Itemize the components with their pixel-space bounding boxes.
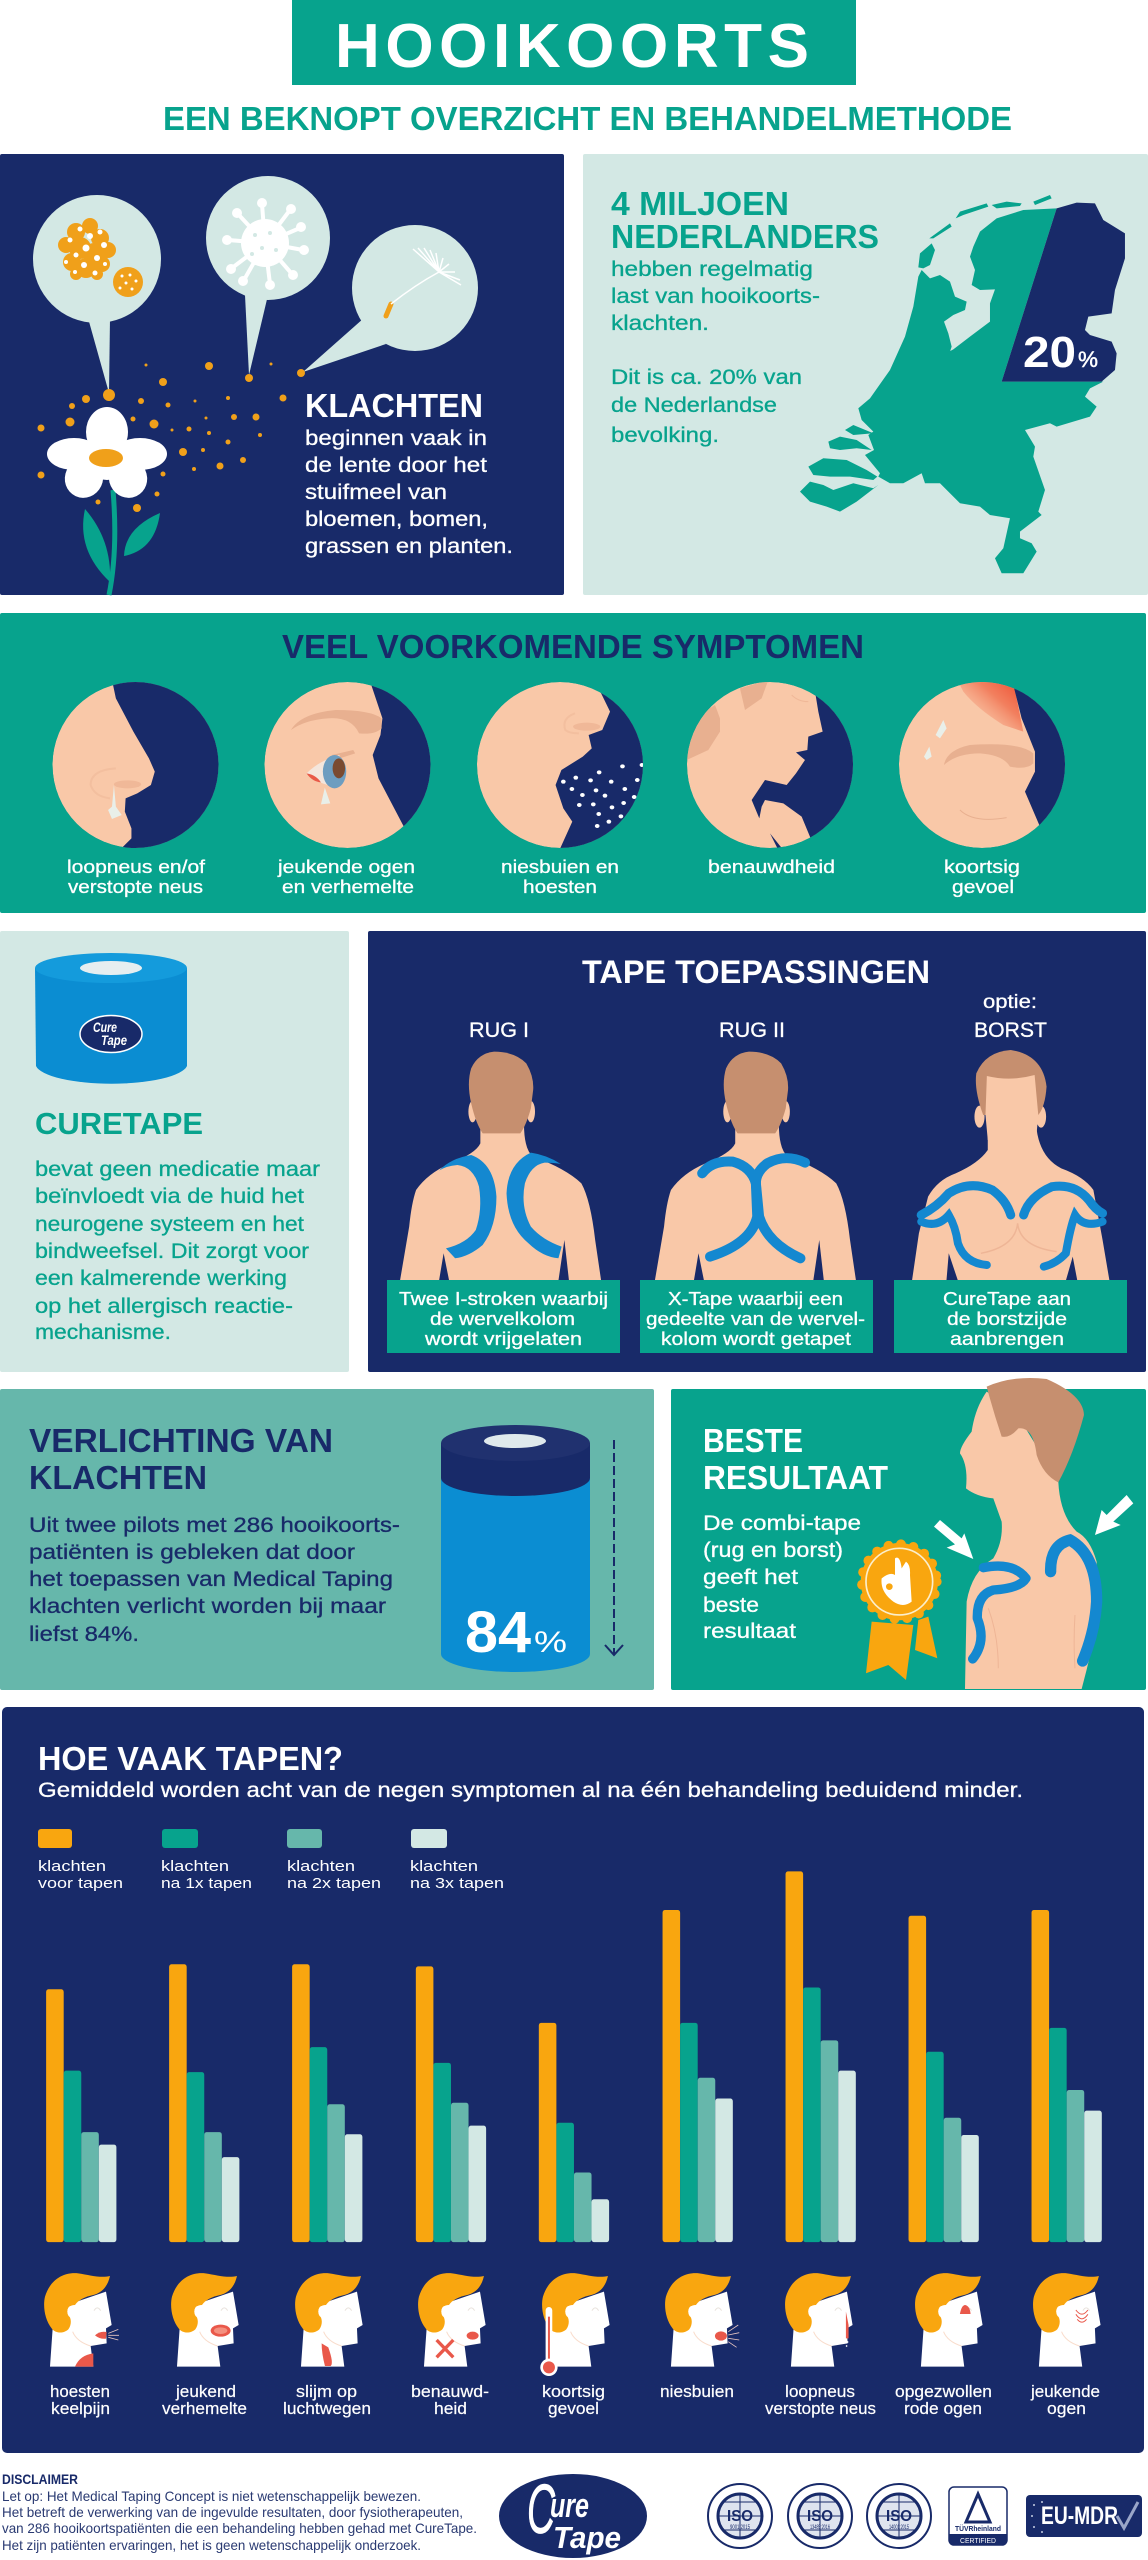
- heading: beste resultaat: BESTE: [703, 1422, 803, 1459]
- label: 20 percent: [1023, 328, 1098, 377]
- symptom names: niesbuien: [660, 2382, 734, 2401]
- badge: ISO 14001: ISO: [886, 2508, 912, 2525]
- heading: klachten: KLACHTEN: [305, 387, 483, 424]
- text: beste resultaat body: geeft het: [703, 1566, 798, 1589]
- symptom names: verstopte neus: [765, 2399, 876, 2418]
- figure: person with combi tape: [934, 1378, 1133, 1689]
- text: klachten body: de lente door het: [305, 454, 487, 477]
- legend: klachten: [161, 1858, 229, 1875]
- symptom names: opgezwollen: [895, 2382, 992, 2401]
- heading: 4 miljoen nederlanders: NEDERLANDERS: [611, 218, 879, 255]
- label: 20 percent: %: [1078, 347, 1098, 372]
- text: nederlanders body: [611, 258, 820, 447]
- logo: curetape: ure: [550, 2487, 589, 2525]
- caption: rug I: Twee I-stroken waarbij: [399, 1289, 608, 1309]
- icon: eye: [264, 682, 433, 850]
- title banner: [292, 0, 856, 85]
- text: beste resultaat body: [703, 1512, 861, 1643]
- subtitle: EEN BEKNOPT OVERZICHT EN BEHANDELMETHODE: [163, 100, 1012, 137]
- heading: beste resultaat: [703, 1422, 888, 1496]
- symptom names: jeukend: [175, 2382, 236, 2401]
- logo: curetape: Tape: [553, 2520, 621, 2555]
- badge: ISO 13485: 13485:2016: [810, 2525, 830, 2531]
- bars: jeukend verhemelte: [169, 1964, 239, 2242]
- icon: virus bubble: [206, 176, 330, 375]
- figure labels: [469, 992, 1047, 1042]
- icon: tape roll: Tape: [101, 1032, 127, 1048]
- bars: loopneus verstopte neus: [786, 1871, 856, 2242]
- badge: ISO 14001: [867, 2484, 931, 2548]
- text: klachten body: grassen en planten.: [305, 535, 513, 558]
- text: nederlanders body: hebben regelmatig: [611, 258, 813, 281]
- symptom names: verhemelte: [162, 2399, 247, 2418]
- figure labels: BORST: [974, 1019, 1047, 1042]
- disclaimer: DISCLAIMER: [2, 2471, 78, 2487]
- caption: borst: de borstzijde: [947, 1309, 1067, 1329]
- panel: klachten: [0, 154, 564, 595]
- figure: rug I: [400, 1052, 601, 1281]
- chart: tape cylinder 84 percent: 84: [465, 1600, 531, 1665]
- symptom names: benauwd-: [411, 2382, 489, 2401]
- badge: EU-MDR: [1026, 2495, 1142, 2537]
- panel: hoe vaak tapen: [2, 1707, 1144, 2453]
- icon: head jeukende ogen: [1033, 2273, 1101, 2367]
- bars: jeukende ogen: [1032, 1910, 1102, 2242]
- symptom labels: [67, 857, 1020, 897]
- icon: flower: [47, 407, 167, 595]
- text: verlichting body: patiënten is gebleken dat door: [29, 1541, 355, 1564]
- symptom names: heid: [434, 2399, 467, 2418]
- legend: na 1x tapen: [161, 1875, 252, 1892]
- map: netherlands: [800, 195, 1125, 573]
- heading: verlichting: KLACHTEN: [29, 1459, 207, 1496]
- title banner: HOOIKOORTS: [335, 12, 809, 81]
- icon: head luchtwegen: [295, 2273, 363, 2367]
- disclaimer: [2, 2471, 477, 2553]
- caption: rug I: wordt vrijgelaten: [424, 1329, 582, 1349]
- legend: na 2x tapen: [287, 1875, 381, 1892]
- icon: head koorts: [540, 2273, 610, 2376]
- text: verlichting body: klachten verlicht worden bij maar: [29, 1595, 386, 1618]
- pollen dots: [38, 362, 305, 512]
- icon: award medal: [861, 1543, 938, 1680]
- panel: verlichting van klachten: [0, 1389, 654, 1690]
- icon: fever: [899, 678, 1073, 848]
- text: curetape body: bevat geen medicatie maar: [35, 1158, 320, 1181]
- caption: rug I: de wervelkolom: [430, 1309, 575, 1329]
- text: nederlanders body: Dit is ca. 20% van: [611, 366, 802, 389]
- badge: ISO 9001: [708, 2484, 772, 2548]
- symptom heads: [44, 2273, 1101, 2376]
- bars: benauwdheid: [416, 1966, 486, 2242]
- text: nederlanders body: last van hooikoorts-: [611, 285, 820, 308]
- text: curetape body: bindweefsel. Dit zorgt voor: [35, 1240, 309, 1263]
- heading: beste resultaat: RESULTAAT: [703, 1459, 888, 1496]
- panel: beste resultaat: [671, 1378, 1146, 1690]
- icon: sneezing: [477, 682, 651, 850]
- disclaimer: Het zijn patiënten ervaringen, het is geen wetenschappelijk onderzoek.: [2, 2537, 421, 2553]
- symptom labels: verstopte neus: [68, 877, 203, 897]
- symptom names: koortsig: [542, 2382, 605, 2401]
- text: curetape body: mechanisme.: [35, 1321, 171, 1344]
- symptom names: hoesten: [50, 2382, 110, 2401]
- caption: borst: aanbrengen: [950, 1329, 1064, 1349]
- caption: borst: CureTape aan: [943, 1289, 1071, 1309]
- text: klachten body: bloemen, bomen,: [305, 508, 488, 531]
- text: verlichting body: liefst 84%.: [29, 1623, 139, 1646]
- legend: na 3x tapen: [410, 1875, 504, 1892]
- text: nederlanders body: de Nederlandse: [611, 394, 777, 417]
- legend: klachten: [38, 1858, 106, 1875]
- icon: tape roll: Cure: [93, 1019, 117, 1035]
- text: curetape body: beïnvloedt via de huid het: [35, 1185, 304, 1208]
- badge: ISO 14001: 14001:2015: [889, 2525, 909, 2531]
- symptom names: luchtwegen: [283, 2399, 371, 2418]
- panel: tape toepassingen: [368, 931, 1146, 1372]
- chart: tape cylinder 84 percent: %: [534, 1626, 567, 1659]
- text: beste resultaat body: (rug en borst): [703, 1539, 843, 1562]
- symptom labels: jeukende ogen: [277, 857, 415, 877]
- bars: opgezwollen rode ogen: [909, 1916, 979, 2242]
- text: curetape body: op het allergisch reactie-: [35, 1295, 293, 1318]
- symptom names: keelpijn: [51, 2399, 110, 2418]
- bars: niesbuien: [663, 1910, 733, 2242]
- symptom labels: en verhemelte: [282, 877, 414, 897]
- chart: tape cylinder 84 percent: [441, 1425, 590, 1672]
- badge: ISO 9001: ISO: [727, 2508, 753, 2525]
- disclaimer: Let op: Het Medical Taping Concept is niet wetenschappelijk bewezen.: [2, 2488, 421, 2504]
- symptom labels: benauwdheid: [708, 857, 835, 877]
- figure labels: RUG II: [719, 1019, 785, 1042]
- badge: EU-MDR: EU-MDR: [1041, 2502, 1118, 2530]
- legend: voor tapen: [38, 1875, 123, 1892]
- text: nederlanders body: bevolking.: [611, 424, 719, 447]
- symptom labels: hoesten: [523, 877, 597, 897]
- caption: rug II: gedeelte van de wervel-: [646, 1309, 865, 1329]
- bars: hoesten keelpijn: [46, 1989, 116, 2242]
- icon: head hoesten: [44, 2273, 119, 2367]
- icon: short of breath: [683, 680, 860, 850]
- heading: verlichting: [29, 1422, 333, 1496]
- badge: TUV certified: TÜVRheinland: [955, 2524, 1001, 2533]
- figure: rug II: [655, 1052, 856, 1281]
- bars: koortsig gevoel: [539, 2023, 609, 2242]
- symptom names: gevoel: [548, 2399, 599, 2418]
- icon: head rode ogen: [915, 2273, 983, 2367]
- icon: dandelion seed bubble: [303, 225, 478, 372]
- text: beste resultaat body: De combi-tape: [703, 1512, 861, 1535]
- badge: ISO 9001: 9001:2015: [730, 2525, 750, 2531]
- badge: TUV certified: CERTIFIED: [960, 2538, 996, 2545]
- bar chart: symptoms over treatments: [46, 1871, 1102, 2242]
- text: klachten body: stuifmeel van: [305, 481, 447, 504]
- legend: klachten: [287, 1858, 355, 1875]
- badge: ISO 13485: ISO: [807, 2508, 833, 2525]
- panel: curetape: [0, 931, 349, 1372]
- heading: hoe vaak tapen: HOE VAAK TAPEN?: [38, 1740, 343, 1777]
- heading: symptomen: VEEL VOORKOMENDE SYMPTOMEN: [282, 628, 864, 665]
- text: nederlanders body: klachten.: [611, 312, 709, 335]
- caption: rug II: kolom wordt getapet: [661, 1329, 851, 1349]
- badge: ISO 13485: [788, 2484, 852, 2548]
- text: beste resultaat body: resultaat: [703, 1620, 796, 1643]
- arrow: dashed downward: [605, 1440, 623, 1655]
- bars: slijm op luchtwegen: [292, 1964, 362, 2242]
- disclaimer: van 286 hooikoortspatiënten die een behandeling hebben gehad met CureTape.: [2, 2520, 477, 2536]
- text: verlichting body: [29, 1514, 400, 1646]
- text: curetape body: neurogene systeem en het: [35, 1213, 304, 1236]
- icon: head niesbuien: [665, 2273, 739, 2367]
- legend: klachten: [410, 1858, 478, 1875]
- panel: 4 miljoen nederlanders: [583, 154, 1148, 595]
- icon: head verhemelte: [171, 2273, 239, 2367]
- symptom labels: loopneus en/of: [67, 857, 206, 877]
- figure labels: optie:: [983, 992, 1037, 1013]
- text: curetape body: een kalmerende werking: [35, 1267, 287, 1290]
- text: verlichting body: Uit twee pilots met 286 hooikoorts-: [29, 1514, 400, 1537]
- symptom names: [50, 2382, 1100, 2418]
- badge: TUV certified: [949, 2487, 1007, 2545]
- figure: borst: [912, 1050, 1109, 1281]
- icon: pollen bubble: [33, 195, 161, 393]
- caption: rug II: [640, 1280, 873, 1353]
- subheading: Gemiddeld worden acht van de negen symptomen al na één behandeling beduidend minder.: [38, 1779, 1023, 1802]
- heading: verlichting: VERLICHTING VAN: [29, 1422, 333, 1459]
- legend: [38, 1829, 504, 1892]
- icon: head loopneus: [785, 2273, 853, 2367]
- icon: tape roll: [35, 953, 187, 1084]
- symptom names: slijm op: [296, 2382, 357, 2401]
- heading: 4 miljoen nederlanders: 4 MILJOEN: [611, 185, 789, 222]
- heading: curetape: CURETAPE: [35, 1106, 203, 1141]
- logo: curetape: C: [527, 2470, 555, 2548]
- text: klachten body: beginnen vaak in: [305, 427, 487, 450]
- figure labels: RUG I: [469, 1019, 529, 1042]
- text: verlichting body: het toepassen van Medical Taping: [29, 1568, 393, 1591]
- disclaimer: Het betreft de verwerking van de ingevulde resultaten, door fysiotherapeuten,: [2, 2504, 463, 2520]
- icon: head benauwdheid: [418, 2273, 486, 2367]
- symptom names: ogen: [1047, 2399, 1086, 2418]
- symptom labels: gevoel: [952, 877, 1014, 897]
- panel: veel voorkomende symptomen: [0, 613, 1146, 913]
- symptom names: loopneus: [785, 2382, 855, 2401]
- symptom names: jeukende: [1030, 2382, 1100, 2401]
- heading: tape toepassingen: TAPE TOEPASSINGEN: [582, 954, 930, 990]
- symptom names: rode ogen: [904, 2399, 982, 2418]
- caption: rug II: X-Tape waarbij een: [668, 1289, 843, 1309]
- logo: curetape: [499, 2470, 647, 2558]
- label: 20 percent: 20: [1023, 328, 1076, 377]
- caption: rug I: [387, 1280, 620, 1353]
- icon: nose: [52, 680, 227, 850]
- text: beste resultaat body: beste: [703, 1594, 759, 1617]
- symptom labels: niesbuien en: [501, 857, 619, 877]
- text: klachten body: [305, 427, 513, 558]
- heading: 4 miljoen nederlanders: [611, 185, 879, 255]
- symptom labels: koortsig: [944, 857, 1020, 877]
- text: curetape body: [35, 1158, 320, 1344]
- caption: borst: [894, 1280, 1127, 1353]
